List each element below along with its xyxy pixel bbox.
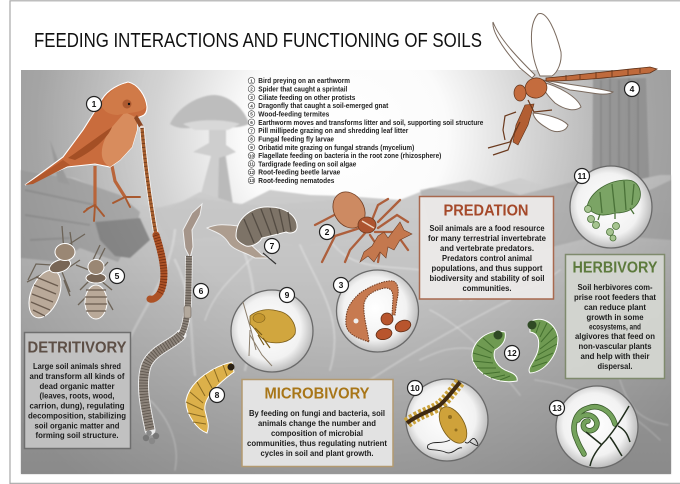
tree stump [592, 78, 650, 205]
panel: microbivory: cycles in soil and plant growth. [260, 448, 374, 458]
panel: detritivory: carrion, dung), regulating [30, 400, 124, 410]
panel: microbivory: MICROBIVORY [264, 386, 370, 402]
legend item 10: 10 [249, 153, 254, 158]
legend item 5: 5 [250, 112, 253, 117]
legend item 12: 12 [249, 170, 254, 175]
icon: dragonfly with gnat [488, 14, 657, 155]
legend item 11: Tardigrade feeding on soil algae [258, 162, 356, 168]
badge 1: 1 [92, 99, 97, 109]
panel: predation: PREDATION [444, 202, 528, 220]
panel: herbivory: growth in some [586, 312, 644, 322]
legend item 9: 9 [250, 145, 253, 150]
panel: detritivory: dead organic matter [40, 381, 115, 391]
badge 13: 13 [552, 403, 562, 413]
legend item 11: 11 [249, 162, 254, 167]
badge 9: 9 [285, 290, 290, 300]
panel: detritivory: Large soil animals shred [33, 361, 121, 371]
panel: predation: Soil animals are a food resource [430, 223, 545, 233]
panel: herbivory: prise root feeders that [574, 292, 656, 302]
legend item 2: 2 [250, 87, 253, 92]
legend item 12: Root-feeding beetle larvae [258, 170, 340, 177]
panel: predation: and vertebrate predators. [440, 243, 534, 253]
number badges [86, 82, 640, 416]
icon: bird with earthworm [25, 82, 164, 299]
icon: tardigrade bubble [570, 166, 652, 248]
badge 6 [194, 284, 208, 298]
legend item 3: 3 [250, 95, 253, 100]
legend item 7: Pill millipede grazing on and shredding leaf litter [258, 128, 409, 135]
panel: microbivory: communities, thus regulating nutrient [247, 438, 387, 448]
badge 2: 2 [325, 227, 330, 237]
panel: herbivory: non-vascular plants [578, 341, 652, 351]
title: FEEDING INTERACTIONS AND FUNCTIONING OF SOILS [34, 30, 482, 52]
badge 3: 3 [339, 280, 344, 290]
panel: herbivory [566, 254, 664, 378]
panel: herbivory: dispersal. [598, 361, 632, 371]
icon: spider with springtail [315, 186, 412, 262]
panel: predation: biodiversity and stability of soil [430, 273, 544, 283]
icon: oribatid mite bubble [231, 290, 313, 372]
soil surface and litter [21, 170, 671, 474]
badge 11: 11 [578, 171, 587, 181]
icon: ciliate bubble [336, 270, 418, 352]
legend item 6: Earthworm moves and transforms litter and soil, supporting soil structure [258, 120, 483, 127]
icon: beetle larvae [472, 319, 558, 382]
plant roots [125, 230, 668, 470]
panel: microbivory: animals change the number and [258, 418, 376, 428]
panel: detritivory [24, 332, 130, 448]
legend item 1: 1 [250, 78, 253, 83]
badge 7: 7 [270, 241, 275, 251]
legend item 4: Dragonfly that caught a soil-emerged gnat [258, 103, 389, 110]
badge 8 [210, 388, 224, 402]
icon: flagellate bubble [406, 379, 488, 461]
panel: predation: communities. [462, 283, 512, 293]
panel: detritivory: decomposition, stabilizing [28, 410, 126, 420]
badge 3 [334, 278, 348, 292]
panel: predation [420, 196, 554, 299]
panel: predation: Predators control animal [442, 253, 532, 263]
badge 6: 6 [199, 286, 204, 296]
panel: herbivory: HERBIVORY [572, 260, 658, 276]
icon: earthworm with leaf [143, 204, 202, 444]
badge 10 [408, 380, 422, 396]
panel: detritivory: DETRITIVORY [28, 340, 127, 356]
legend item 2: Spider that caught a sprintail [258, 86, 347, 94]
panel: herbivory: algivores that feed on [575, 331, 655, 341]
panel: herbivory: and help with their [580, 351, 650, 361]
panel: microbivory: composition of microbial [271, 428, 363, 438]
legend item 5: Wood-feeding termites [258, 112, 329, 118]
legend item 3: Ciliate feeding on other protists [258, 95, 355, 102]
panel: predation: for many terrestrial invertebrate [428, 233, 546, 243]
panel: detritivory: and transform all kinds of [30, 371, 125, 381]
panel: detritivory: soil organic matter and [34, 420, 120, 430]
legend item 4: 4 [250, 103, 253, 108]
earthworm prey [142, 128, 164, 299]
badge 4 [624, 82, 640, 96]
legend item 8: Fungal feeding fly larvae [258, 136, 334, 144]
panel: microbivory: By feeding on fungi and bacteria, soil [249, 408, 385, 418]
badge 11 [574, 168, 590, 184]
badge 8: 8 [215, 390, 220, 400]
icon: fly larva [186, 362, 234, 433]
badge 4: 4 [630, 84, 635, 94]
badge 13 [550, 400, 564, 416]
mushroom [170, 95, 249, 205]
legend item 8: 8 [250, 137, 253, 142]
icon: nematode bubble [556, 386, 638, 468]
badge 5 [110, 268, 124, 284]
panel: herbivory: ecosystems, and [589, 322, 641, 332]
legend item 13: 13 [249, 178, 254, 183]
panel: soil scene background [21, 70, 671, 474]
panel: microbivory [242, 380, 393, 466]
bird list legend [248, 77, 483, 185]
panel: herbivory: Soil herbivores com- [578, 282, 653, 292]
badge 9 [280, 288, 294, 302]
badge 10: 10 [410, 383, 420, 393]
log [21, 170, 140, 262]
panel: predation: populations, and thus support [432, 263, 543, 273]
icon: termites [23, 226, 113, 322]
badge 5: 5 [115, 271, 120, 281]
badge 12: 12 [507, 348, 517, 358]
badge 12 [504, 346, 520, 360]
panel: detritivory: forming soil structure. [36, 430, 118, 440]
icon: pill millipede with leaf [207, 207, 297, 264]
panel: detritivory: (leaves, roots, wood, [40, 390, 114, 400]
panel: herbivory: can reduce plant [584, 302, 646, 312]
legend item 10: Flagellate feeding on bacteria in the root zone (rhizosphere) [258, 153, 441, 160]
legend item 7: 7 [250, 128, 253, 133]
legend item 6: 6 [250, 120, 253, 125]
badge 7 [264, 238, 280, 254]
legend item 13: Root-feeding nematodes [258, 178, 334, 185]
badge 2 [320, 224, 334, 240]
legend item 1: Bird preying on an earthworm [258, 78, 350, 85]
badge 1 [86, 96, 102, 112]
legend item 9: Oribatid mite grazing on fungal strands (mycelium) [258, 145, 414, 152]
